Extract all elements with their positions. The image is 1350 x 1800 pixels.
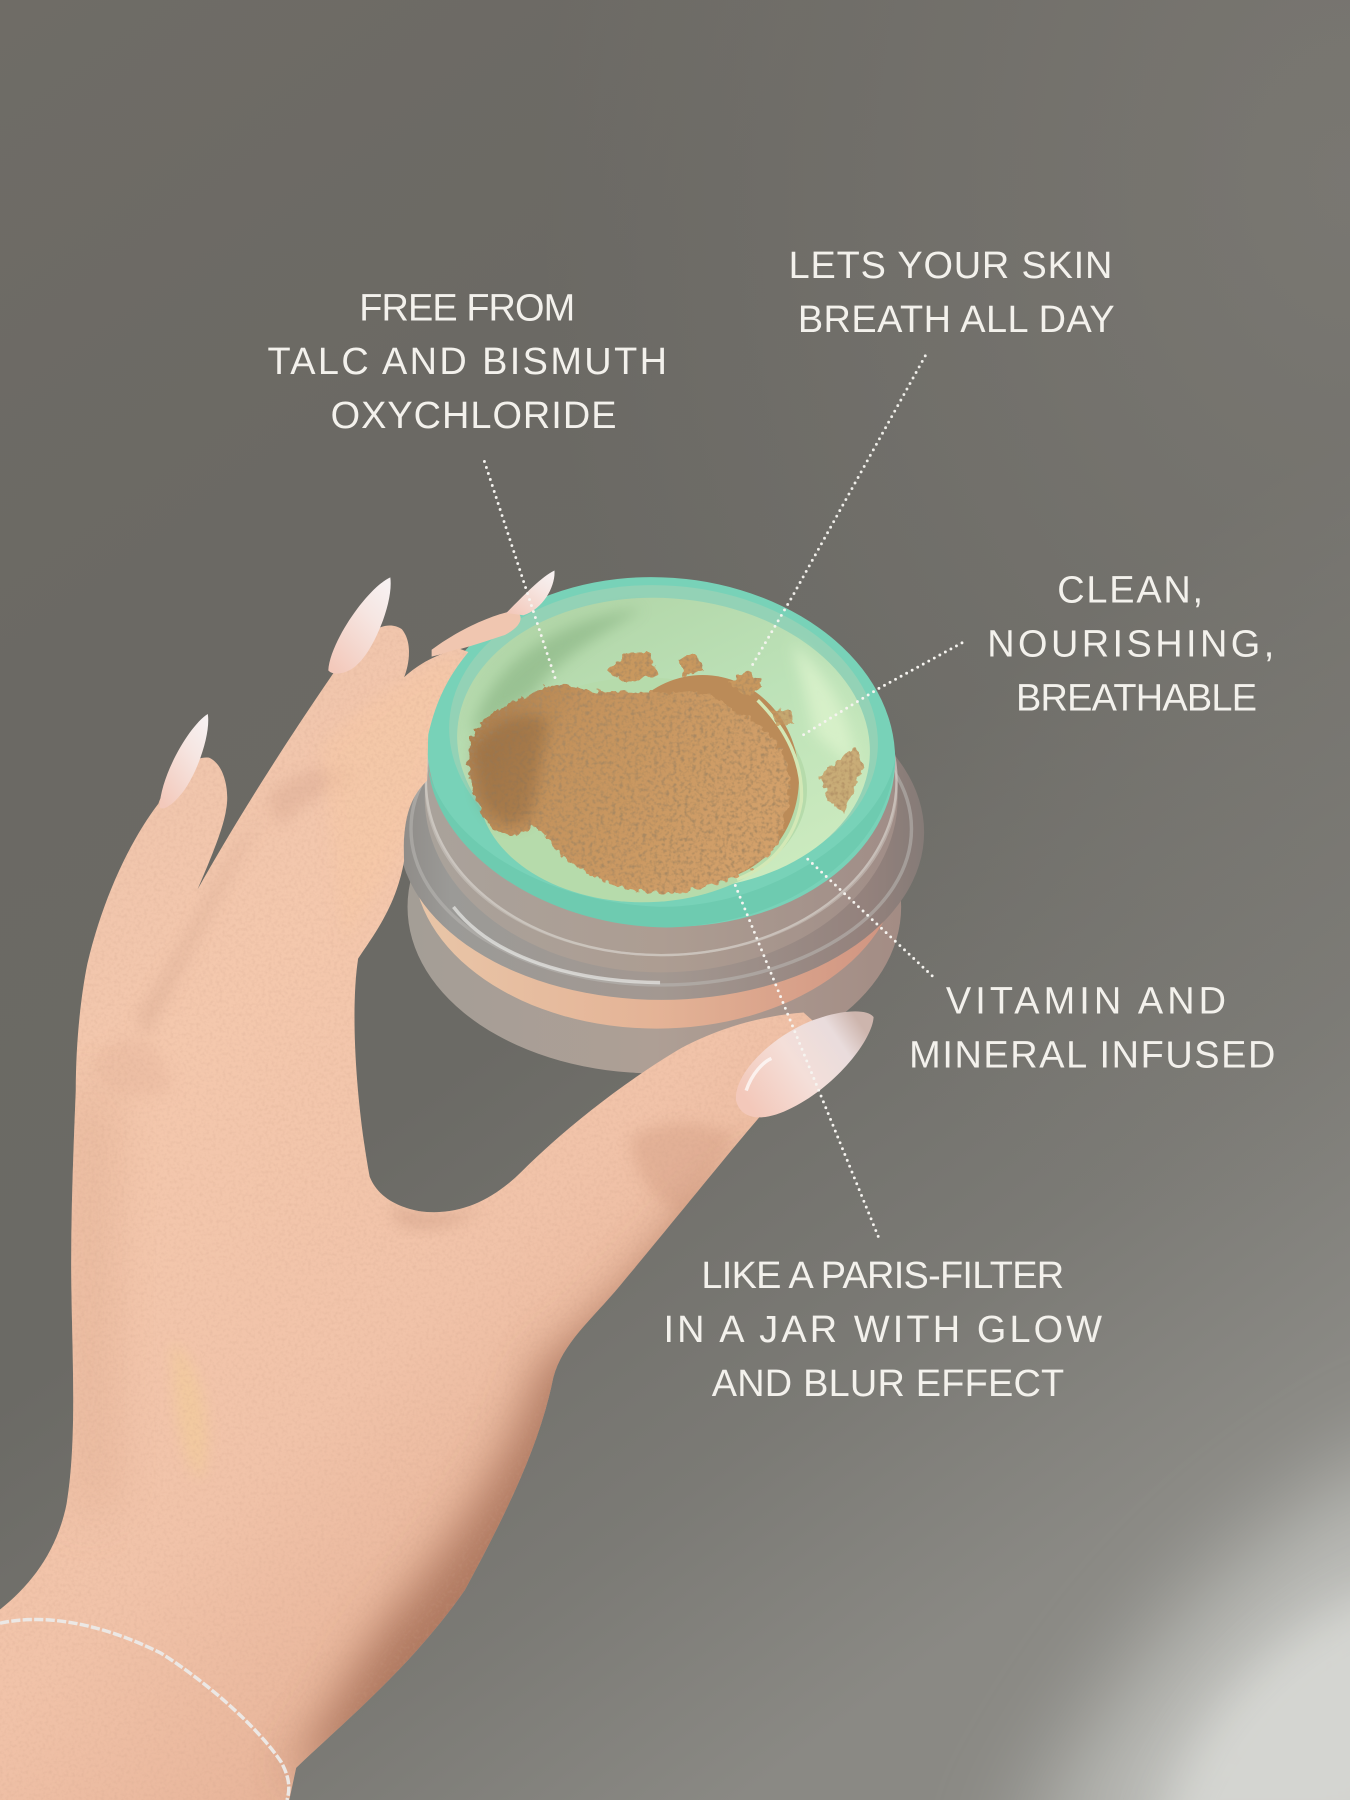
threaded neck (425, 623, 898, 972)
callout: paris filter: AND BLUR EFFECT (712, 1363, 1064, 1405)
clear flange (398, 665, 924, 1000)
powder crumbs (607, 652, 863, 813)
callout: vitamin and mineral (909, 981, 1275, 1077)
clear lower jar (408, 740, 901, 1073)
skin texture (56, 674, 684, 1639)
jar sifter rim (415, 562, 907, 942)
background wall (290, 0, 1350, 1800)
leader: clean (804, 643, 962, 735)
sifter well (479, 677, 807, 902)
callout: free from: TALC AND BISMUTH (267, 341, 667, 383)
hand shading (0, 574, 918, 1800)
peach band (413, 693, 900, 1029)
leader: free from (484, 461, 557, 683)
leader: skin breath (752, 356, 925, 666)
callout: paris filter (664, 1255, 1102, 1405)
mesh screen (606, 675, 799, 882)
callout: lets your skin breath (789, 245, 1115, 341)
leader: paris filter (735, 884, 878, 1236)
callout: clean nourishing breathable: BREATHABLE (1016, 678, 1257, 720)
nail: thumb (736, 1011, 874, 1117)
callout: free from: FREE FROM (359, 287, 575, 329)
callout: clean nourishing breathable: CLEAN, (1057, 570, 1203, 612)
far finger behind jar (432, 611, 521, 657)
jar base (398, 606, 924, 1073)
callout: clean nourishing breathable: NOURISHING, (987, 624, 1274, 666)
loose powder mound (468, 684, 789, 892)
callout: free from (267, 287, 667, 437)
callout: free from: OXYCHLORIDE (331, 395, 616, 437)
nail: middle finger (506, 571, 555, 615)
callout: lets your skin breath: BREATH ALL DAY (798, 299, 1115, 341)
nail: pinky finger (160, 714, 208, 808)
callout: paris filter: LIKE A PARIS-FILTER (701, 1255, 1064, 1297)
callout: vitamin and mineral: MINERAL INFUSED (909, 1035, 1275, 1077)
nail: ring finger (328, 577, 391, 674)
callout: paris filter: IN A JAR WITH GLOW (664, 1309, 1102, 1351)
callout: clean nourishing breathable (987, 570, 1274, 720)
dotted leader lines (484, 356, 962, 1236)
hand and wrist (0, 625, 827, 1800)
leader: vitamin (804, 855, 932, 976)
callout: vitamin and mineral: VITAMIN AND (946, 981, 1226, 1023)
bracelet (0, 1619, 289, 1800)
callout: lets your skin breath: LETS YOUR SKIN (789, 245, 1112, 287)
hand (0, 571, 918, 1800)
